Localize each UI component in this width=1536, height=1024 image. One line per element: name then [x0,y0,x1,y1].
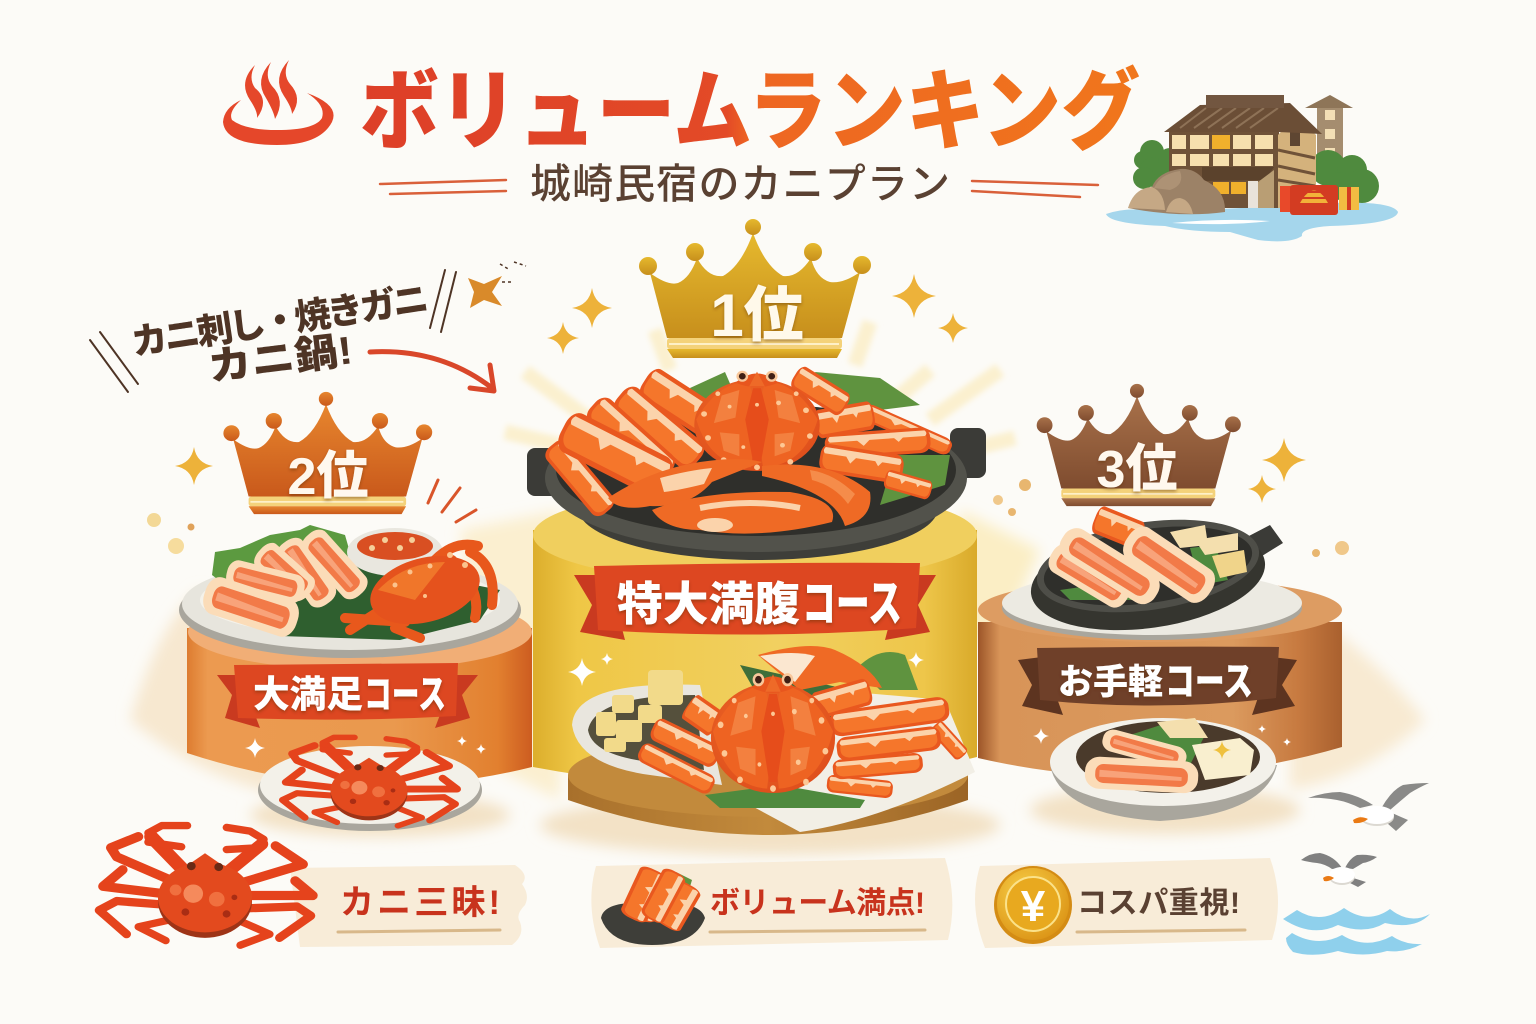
subtitle [380,161,1098,207]
rays behind first place [505,322,1015,448]
course name: お手軽 [1058,663,1163,702]
course name: 特大満腹 [617,578,800,630]
star [468,276,502,308]
rank label 1位: 1位 [710,282,804,349]
lettuce [690,372,950,505]
ribbon banner [217,663,478,728]
callout: ボリューム満点! [591,858,952,948]
front claws [608,459,762,508]
label: ボリューム満点! [710,887,925,920]
course name [1058,660,1253,704]
illustration: ryokan by the water [1106,95,1398,241]
course name [253,673,446,717]
cylinder [978,622,1342,777]
icon: waves [1283,908,1430,955]
plate with sashimi and crab [179,525,521,658]
ribbon banner [1018,647,1297,715]
wood board with crab and side dish [568,646,975,835]
left legs [648,716,723,769]
tofu [596,670,683,752]
sashimi [297,525,372,604]
sparkles around first crown [547,274,968,354]
steel dish [572,684,722,785]
paint strip [290,865,527,947]
decorations around second crown [147,447,476,554]
title [223,60,1140,161]
building [1164,95,1322,208]
callout: カニ刺し・焼きガニ カニ鍋!: カニ刺し・焼きガニ [129,278,431,363]
right legs [929,720,969,762]
course name: 大満足 [253,674,363,715]
bowl with crab and tofu [1050,718,1277,821]
water [1106,203,1398,241]
crab legs [1090,505,1147,550]
small bowl [347,528,443,576]
rocks [1128,169,1225,214]
podium 2: orange [179,525,532,831]
cylinder [533,530,977,786]
arrow [370,352,494,391]
paint strip [975,858,1278,948]
podium 1: gold [527,364,986,835]
course name [617,576,902,632]
left legs [635,365,725,441]
label: コスパ重視! [1077,887,1240,920]
red wrapped box [1280,185,1359,215]
course name: コース [1165,660,1253,704]
crab body [711,673,835,793]
crab [345,545,493,638]
cylinder [187,628,532,785]
third place crown [1037,384,1241,506]
subtitle text: 城崎民宿のカニプラン [530,161,950,207]
icon: hot spring [223,60,334,145]
dark pan with large crab [527,364,986,560]
decorations around third crown [993,438,1349,557]
second place crown [223,392,432,514]
paper sheet [750,690,975,832]
rank label 2位: 2位 [288,448,368,506]
right legs [859,402,954,457]
icon: seagull lower [1301,853,1377,887]
small plate with red crab [258,737,482,831]
icon: yen coin: ¥ [1021,882,1046,931]
lettuce [212,525,355,590]
icon: yen coin [994,866,1072,944]
podium 3: brown [978,505,1342,821]
lettuce [740,665,850,720]
icon: seagull upper [1308,783,1429,831]
callout second line: カニ鍋! [206,329,355,390]
label: カニ三昧! [340,884,500,922]
heading: ボリュームランキング: ボリュームランキング [360,62,1140,161]
top claw [758,646,882,690]
first place crown [639,219,871,358]
sand wash behind podiums [130,510,1425,855]
sparkles [568,652,924,686]
rank label 3位: 3位 [1097,441,1177,499]
crab body [694,371,820,471]
course name: コース [802,576,902,632]
icon: red crab [99,826,313,945]
paint strip [591,858,952,948]
hatch marks [90,270,456,392]
lettuce [1060,580,1150,600]
sparkles [245,736,486,758]
plate and iron pan [1002,505,1302,644]
bushes [1133,140,1379,203]
callout: カニ三昧! [99,826,527,947]
course name: コース [364,673,446,717]
callout: コスパ重視! [975,858,1278,948]
tofu [1170,525,1208,548]
sparkle [1033,725,1291,746]
icon: crab legs in bowl [601,864,705,945]
tower [1305,95,1353,178]
ribbon banner [574,563,936,640]
callout: カニ刺し・焼きガニ カニ鍋! [90,262,526,392]
